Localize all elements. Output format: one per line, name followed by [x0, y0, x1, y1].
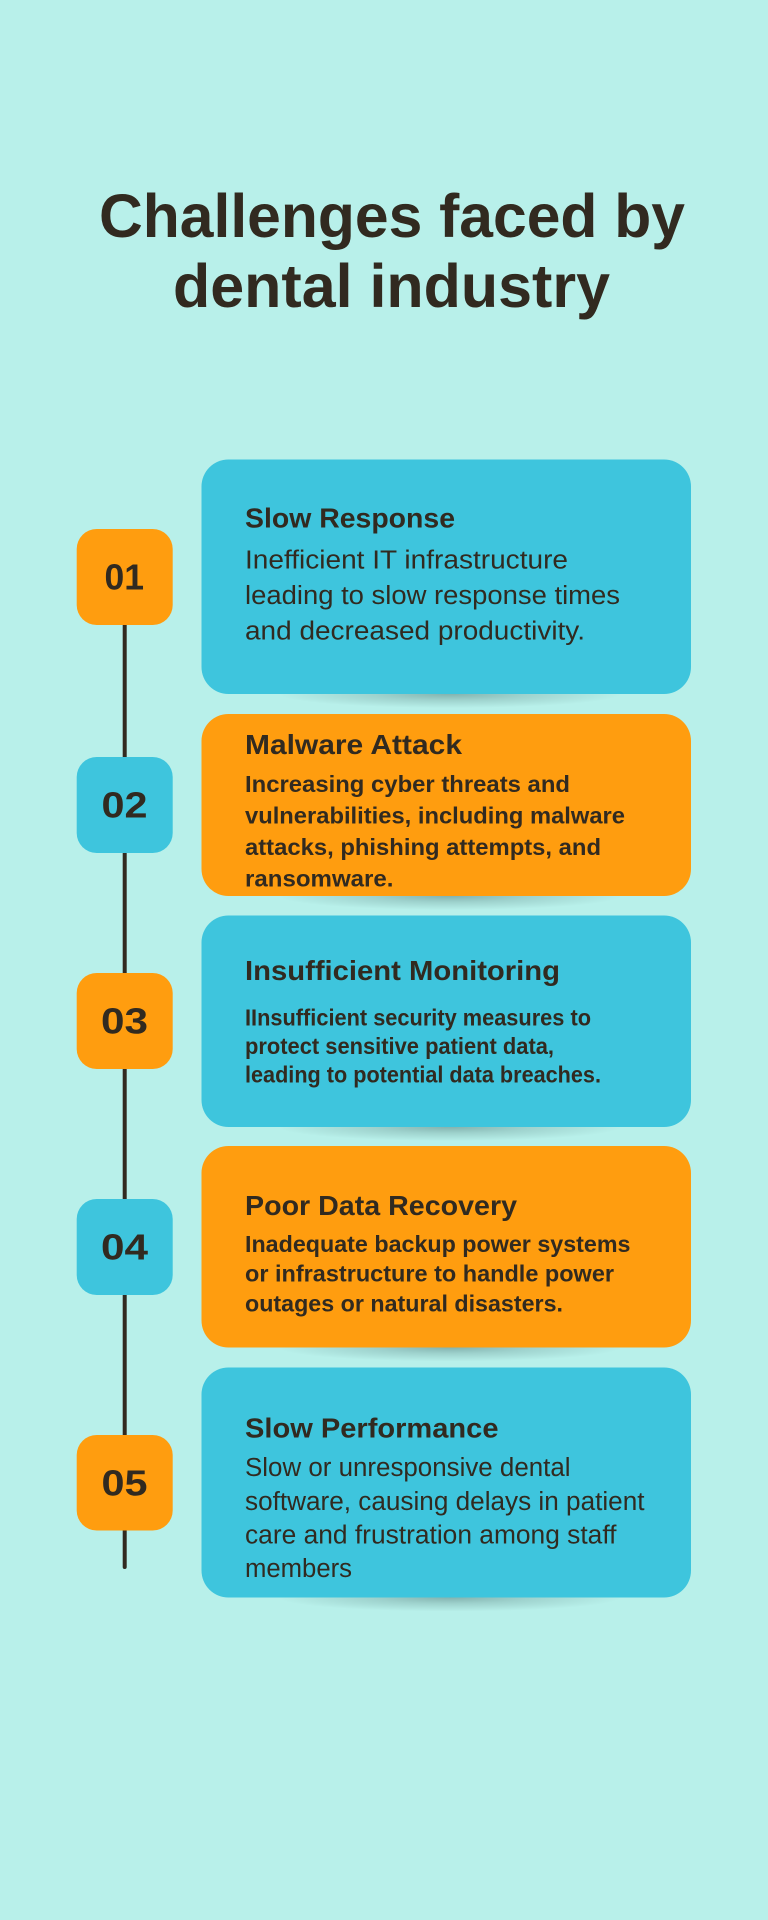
badge 04: 04	[101, 1226, 148, 1268]
card: Insufficient Monitoring: protect sensitive patient data,	[245, 1033, 554, 1059]
card: Malware Attack: ransomware.	[245, 866, 394, 892]
step 02	[77, 714, 691, 910]
card: Malware Attack	[202, 714, 691, 896]
badge 04	[77, 1199, 173, 1295]
step 01	[77, 460, 691, 708]
card: Slow Performance: software, causing delays in patient	[245, 1488, 644, 1516]
card shadow 02	[278, 882, 622, 910]
card: Malware Attack: vulnerabilities, including malware	[245, 802, 625, 828]
card: Slow Response: and decreased productivity.	[245, 618, 585, 646]
badge 01: 01	[104, 556, 144, 597]
card shadow 03	[278, 1113, 622, 1141]
card: Poor Data Recovery: or infrastructure to handle power	[245, 1260, 614, 1286]
card: Insufficient Monitoring: leading to potential data breaches.	[245, 1062, 601, 1088]
badge 02: 02	[102, 784, 148, 826]
card: Insufficient Monitoring: Insufficient Monitoring	[245, 955, 560, 986]
card: Slow Response: Slow Response	[245, 502, 455, 534]
card shadow 04	[278, 1334, 622, 1362]
card: Slow Performance: Slow or unresponsive dental	[245, 1454, 570, 1482]
card: Slow Performance	[202, 1368, 691, 1598]
card: Slow Performance: care and frustration among staff	[245, 1522, 617, 1550]
card: Poor Data Recovery: Poor Data Recovery	[245, 1190, 517, 1221]
card: Insufficient Monitoring	[202, 916, 691, 1127]
card: Slow Response	[202, 460, 691, 694]
step 04	[77, 1146, 691, 1362]
card: Poor Data Recovery	[202, 1146, 691, 1348]
card shadow 01	[278, 680, 622, 708]
card: Malware Attack: Malware Attack	[245, 729, 462, 760]
card: Malware Attack: attacks, phishing attempts, and	[245, 834, 601, 860]
card shadow 05	[278, 1584, 622, 1612]
card: Insufficient Monitoring: IInsufficient security measures to	[245, 1004, 591, 1030]
card: Slow Performance: members	[245, 1555, 352, 1583]
card: Slow Performance: Slow Performance	[245, 1412, 498, 1444]
title	[99, 182, 685, 320]
timeline line	[123, 620, 127, 1567]
badge 05: 05	[102, 1462, 148, 1504]
title: dental industry	[173, 252, 610, 320]
badge 02	[77, 757, 173, 853]
badge 01	[77, 529, 173, 625]
badge 05	[77, 1435, 173, 1530]
badge 03	[77, 973, 173, 1069]
step 03	[77, 916, 691, 1141]
step 05	[77, 1368, 691, 1612]
card: Slow Response: Inefficient IT infrastructure	[245, 546, 568, 574]
card: Poor Data Recovery: Inadequate backup power systems	[245, 1231, 630, 1257]
card: Slow Response: leading to slow response times	[245, 582, 620, 610]
card: Malware Attack: Increasing cyber threats and	[245, 771, 570, 797]
card: Poor Data Recovery: outages or natural disasters.	[245, 1290, 563, 1316]
badge 03: 03	[101, 1000, 148, 1042]
title: Challenges faced by	[99, 182, 685, 250]
